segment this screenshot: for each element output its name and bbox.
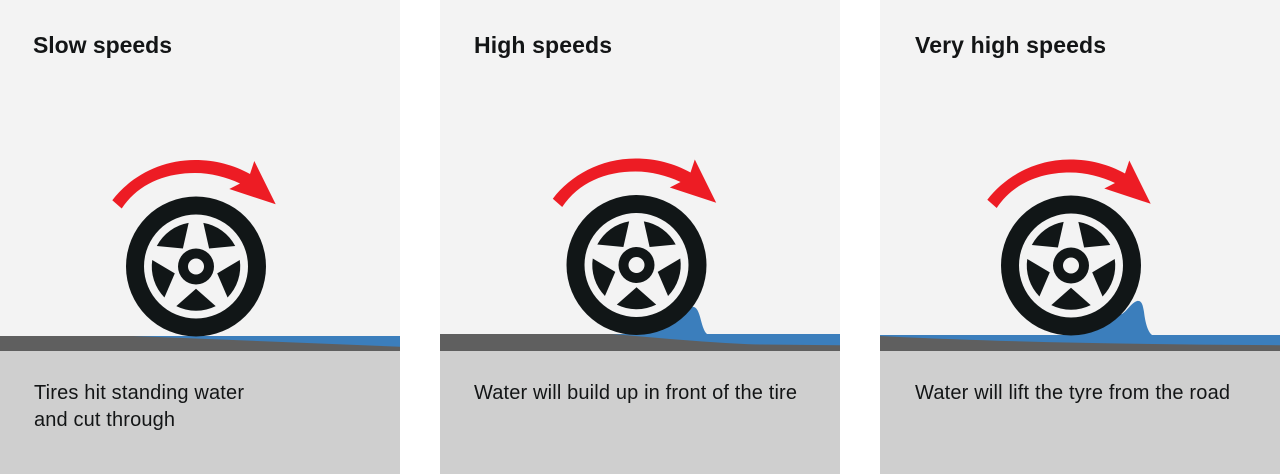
icon: rotation arrow xyxy=(553,158,716,207)
heading: High speeds xyxy=(474,32,612,58)
icon: rotation arrow xyxy=(987,160,1151,208)
panel: very high speeds xyxy=(880,0,1280,474)
road xyxy=(0,336,400,351)
icon: wheel xyxy=(566,195,706,335)
heading: Slow speeds xyxy=(33,32,172,58)
description xyxy=(34,382,244,431)
icon: wheel xyxy=(126,196,266,336)
description: Water will build up in front of the tire xyxy=(474,382,797,404)
road xyxy=(880,335,1280,351)
water layer xyxy=(133,336,400,347)
panel: high speeds xyxy=(440,0,840,474)
water lift xyxy=(880,301,1280,345)
panel: slow speeds xyxy=(0,0,400,474)
heading: Very high speeds xyxy=(915,32,1106,58)
description: Water will lift the tyre from the road xyxy=(915,382,1230,404)
water build-up xyxy=(612,307,840,345)
icon: rotation arrow xyxy=(112,160,276,208)
icon: wheel xyxy=(1001,196,1141,336)
road xyxy=(440,334,840,351)
description: and cut through xyxy=(34,409,175,431)
description: Tires hit standing water xyxy=(34,382,244,404)
